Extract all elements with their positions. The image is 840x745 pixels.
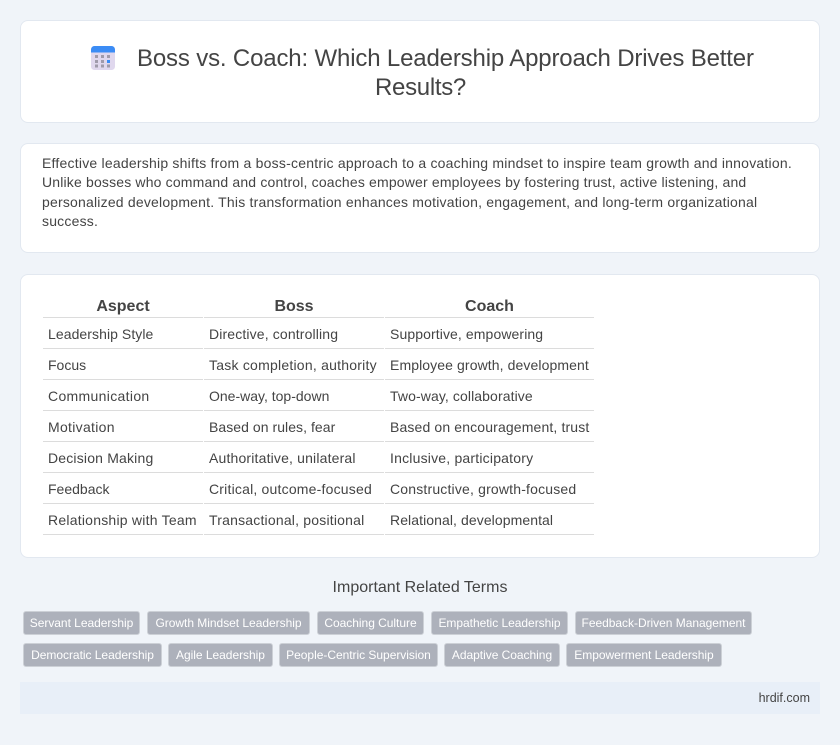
column headers [96, 298, 514, 315]
comparison table: Task completion, authority [209, 357, 377, 373]
comparison table: Directive, controlling [209, 326, 338, 342]
comparison table: Decision Making [48, 450, 153, 466]
title: Results? [375, 74, 466, 101]
icon: calendar [91, 46, 115, 70]
comparison table: Critical, outcome-focused [209, 481, 372, 497]
related terms tags: Agile Leadership [176, 648, 265, 662]
intro paragraph: personalized development. This transformation enhances motivation, engagement, and long-term organizational [42, 194, 757, 210]
title: Boss vs. Coach: Which Leadership Approach Drives Better [137, 45, 754, 72]
comparison table: Supportive, empowering [390, 326, 543, 342]
related terms heading: Important Related Terms [333, 579, 507, 596]
intro paragraph: success. [42, 213, 98, 229]
intro paragraph: Unlike bosses who command and control, coaches empower employees by fostering trust, active listening, and [42, 174, 746, 190]
related terms tags: Democratic Leadership [31, 648, 154, 662]
comparison table: Inclusive, participatory [390, 450, 533, 466]
comparison table [43, 298, 594, 535]
comparison table panel [20, 274, 820, 558]
title [137, 45, 754, 101]
related terms tags [23, 611, 752, 667]
related terms tags: Coaching Culture [324, 616, 417, 630]
header panel [20, 20, 820, 123]
intro paragraph [42, 155, 792, 229]
comparison table: Employee growth, development [390, 357, 589, 373]
footer bar [20, 682, 820, 714]
comparison table: Motivation [48, 419, 115, 435]
comparison table: Focus [48, 357, 86, 373]
comparison table: Feedback [48, 481, 109, 497]
comparison table: One-way, top-down [209, 388, 329, 404]
related terms tags: Servant Leadership [30, 616, 133, 630]
intro paragraph: Effective leadership shifts from a boss-centric approach to a coaching mindset to inspire team growth and innovation. [42, 155, 792, 171]
related terms tags: Adaptive Coaching [452, 648, 552, 662]
comparison table: Transactional, positional [209, 512, 364, 528]
related terms tags: People-Centric Supervision [286, 648, 431, 662]
source label: hrdif.com [759, 691, 810, 705]
comparison table: Two-way, collaborative [390, 388, 533, 404]
related terms tags: Growth Mindset Leadership [156, 616, 302, 630]
column headers: Aspect [96, 298, 150, 315]
comparison table: Based on rules, fear [209, 419, 335, 435]
comparison table: Relationship with Team [48, 512, 197, 528]
comparison table: Authoritative, unilateral [209, 450, 356, 466]
comparison table: Based on encouragement, trust [390, 419, 589, 435]
column headers: Coach [465, 298, 514, 315]
related terms tags: Empathetic Leadership [438, 616, 561, 630]
related terms tags: Feedback-Driven Management [582, 616, 745, 630]
comparison table: Constructive, growth-focused [390, 481, 576, 497]
comparison table: Relational, developmental [390, 512, 553, 528]
intro text panel [20, 143, 820, 253]
comparison table: Communication [48, 388, 150, 404]
related terms tags: Empowerment Leadership [574, 648, 714, 662]
column headers: Boss [274, 298, 314, 315]
comparison table: Leadership Style [48, 326, 153, 342]
